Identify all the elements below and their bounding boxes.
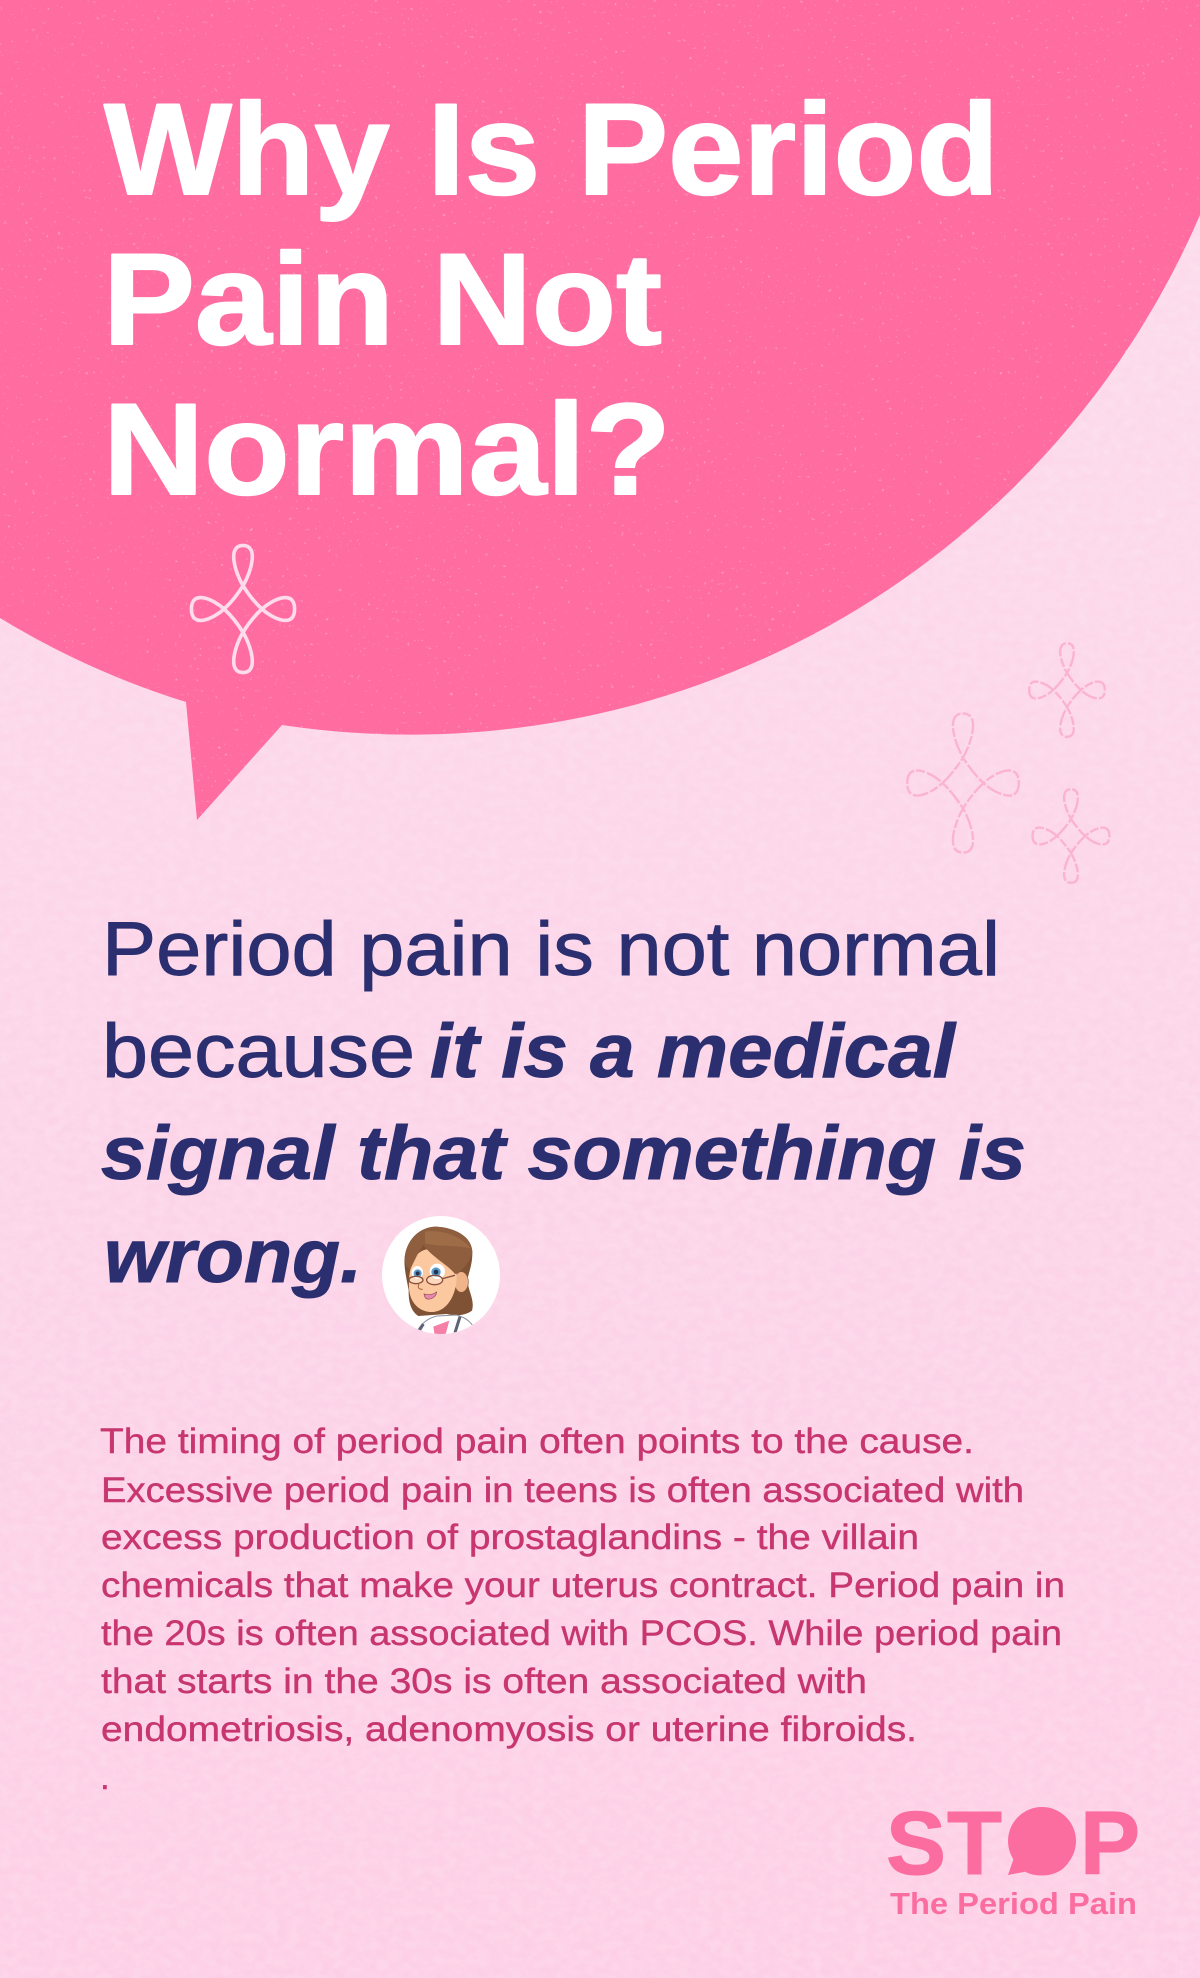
title: Why Is Period (104, 76, 999, 222)
regular lead-in text: Period pain is not normal (102, 907, 1000, 992)
face (409, 1249, 457, 1312)
logo wordmark STOP with speech-bubble O: STOP (886, 1794, 1140, 1894)
eyes (412, 1266, 423, 1279)
body text block: . (100, 1758, 110, 1797)
icon: white sparkle on bubble (191, 545, 295, 673)
regular lead-in text (102, 907, 1000, 1094)
fringe (405, 1227, 472, 1274)
speech bubble header panel (0, 0, 1200, 830)
mouth (424, 1292, 437, 1299)
shirt (433, 1320, 450, 1334)
body text block: the 20s is often associated with PCOS. While period pain (101, 1614, 1062, 1653)
body text block: that starts in the 30s is often associated with (101, 1662, 867, 1701)
ear (454, 1272, 468, 1292)
body text block: Excessive period pain in teens is often associated with (101, 1471, 1024, 1510)
nose (418, 1282, 423, 1289)
logo tagline: The Period Pain (890, 1886, 1137, 1921)
bold italic emphasis text: wrong. (104, 1214, 362, 1299)
key message heading (101, 907, 1026, 1299)
title (103, 76, 999, 522)
body text block: excess production of prostaglandins - the villain (101, 1518, 919, 1557)
icon: faint sparkles cluster (907, 643, 1109, 883)
body text block: chemicals that make your uterus contract. Period pain in (101, 1566, 1065, 1605)
body text block: endometriosis, adenomyosis or uterine fibroids. (101, 1710, 917, 1749)
coat (418, 1314, 473, 1334)
icon: doctor avatar (382, 1216, 500, 1337)
body text block (100, 1422, 1065, 1797)
regular lead-in text: because (102, 1009, 415, 1094)
bold italic emphasis text (101, 1009, 1026, 1299)
hair back (404, 1227, 473, 1316)
body text block: The timing of period pain often points to the cause. (100, 1422, 974, 1461)
bold italic emphasis text: it is a medical (430, 1009, 957, 1094)
title: Normal? (103, 376, 671, 522)
title: Pain Not (103, 226, 662, 372)
bold italic emphasis text: signal that something is (101, 1111, 1026, 1196)
logo: Stop The Period Pain (886, 1794, 1140, 1921)
stethoscope straps (419, 1317, 460, 1333)
glasses (409, 1275, 455, 1285)
